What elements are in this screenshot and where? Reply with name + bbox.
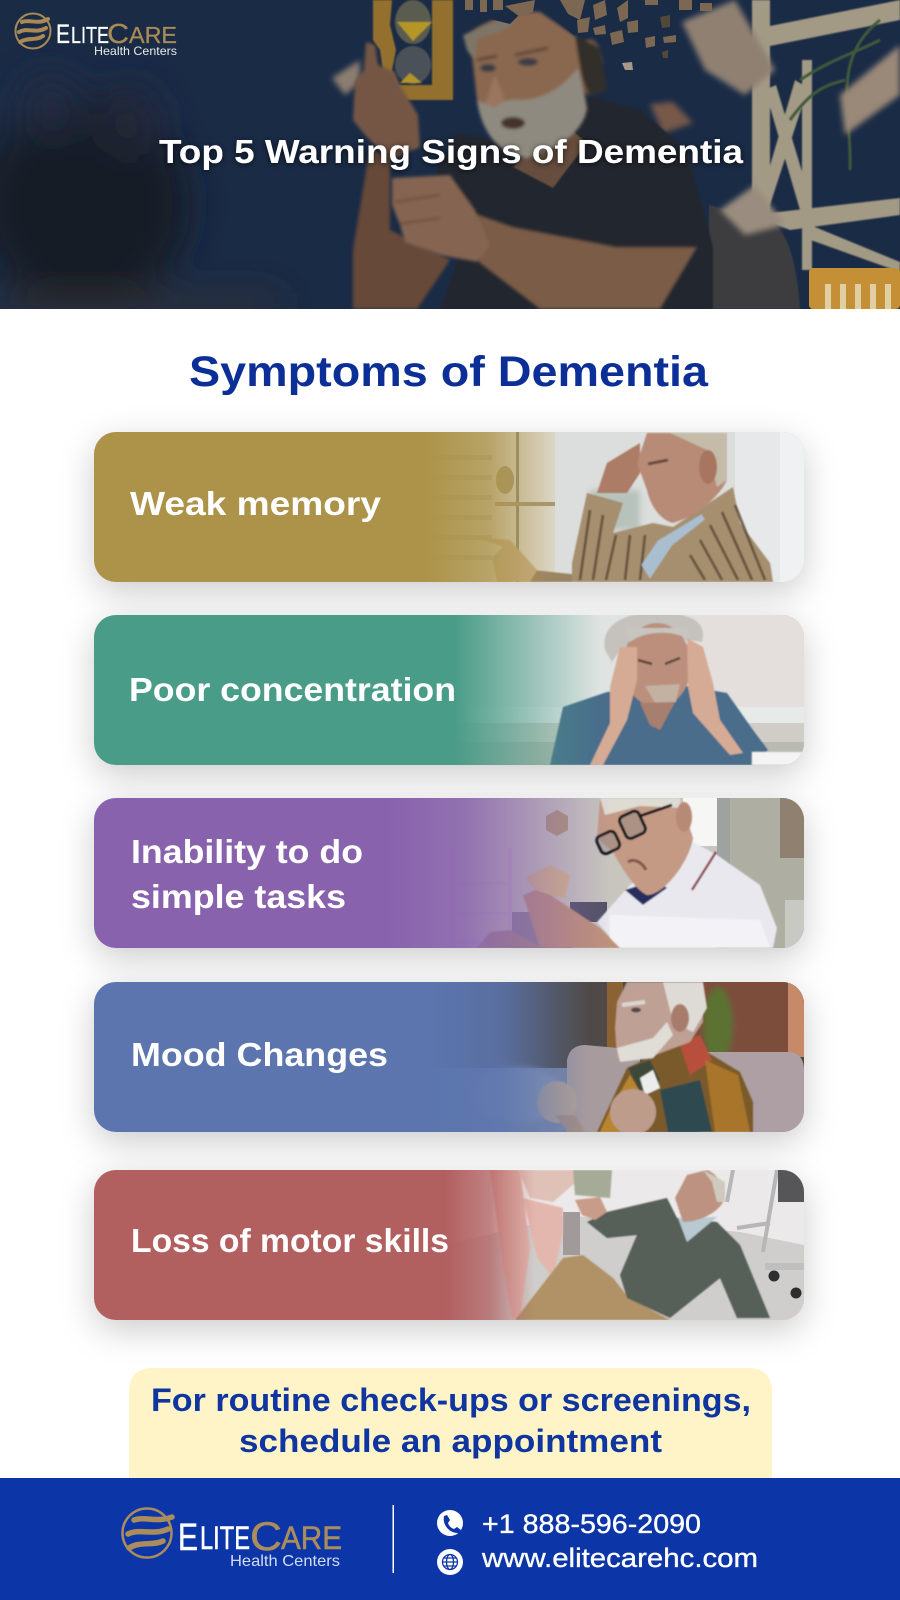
logo wordmark: C bbox=[107, 18, 129, 49]
flying fragments, blurred bbox=[332, 0, 900, 235]
icon: globe bbox=[437, 1549, 463, 1575]
left arm and hand holding hourglass bbox=[353, 42, 450, 309]
photo: man touching head at calendar bbox=[420, 432, 804, 582]
hourglass bbox=[373, 0, 453, 100]
footer logo wordmark: E bbox=[178, 1517, 198, 1559]
label: Weak memory bbox=[130, 485, 382, 522]
neck bbox=[513, 132, 587, 188]
panel fade bbox=[445, 1170, 531, 1320]
label: Mood Changes bbox=[131, 1036, 388, 1073]
blurred plant on left bbox=[0, 88, 266, 309]
hero title: Top 5 Warning Signs of Dementia bbox=[159, 133, 744, 170]
website: www.elitecarehc.com bbox=[481, 1543, 758, 1573]
panel fade bbox=[380, 798, 615, 948]
yellow basket bbox=[809, 268, 900, 309]
panel: mood changes bbox=[94, 982, 804, 1135]
logo wordmark bbox=[58, 24, 176, 55]
grey pouf bbox=[709, 205, 800, 309]
footer logo wordmark bbox=[178, 1515, 342, 1570]
logo wordmark: ARE bbox=[129, 22, 177, 48]
panel: inability to do simple tasks bbox=[94, 798, 804, 948]
panel: poor concentration bbox=[94, 613, 804, 765]
head fragments bbox=[465, 0, 712, 70]
phone number: +1 888-596-2090 bbox=[482, 1509, 701, 1539]
head with beard bbox=[463, 12, 607, 158]
photo: caregiver helping man off floor bbox=[445, 1170, 804, 1320]
callout text bbox=[151, 1382, 751, 1459]
section heading: Symptoms of Dementia bbox=[189, 348, 709, 396]
shirt bbox=[437, 97, 713, 309]
footer logo wordmark: ARE bbox=[281, 1520, 342, 1556]
hero banner photo: man with hourglass bbox=[0, 0, 900, 312]
footer logo bbox=[122, 1508, 342, 1570]
panel fade bbox=[420, 432, 560, 582]
photo: man holding temples bbox=[450, 613, 804, 765]
logo wordmark: Health Centers bbox=[94, 44, 177, 58]
logo wordmark: LITE bbox=[71, 22, 109, 48]
footer logo wordmark: LITE bbox=[200, 1520, 250, 1556]
shelf unit bbox=[752, 0, 900, 272]
head top gap bbox=[490, 10, 576, 36]
label bbox=[131, 833, 363, 915]
footer logo emblem bbox=[122, 1508, 172, 1558]
callout text: schedule an appointment bbox=[239, 1423, 662, 1459]
panel fade bbox=[450, 615, 605, 765]
photo: angry man with fists on sofa bbox=[468, 982, 804, 1132]
panel: loss of motor skills bbox=[94, 1170, 804, 1320]
plant on shelf bbox=[790, 20, 880, 170]
logo emblem bbox=[16, 14, 50, 48]
top left logo bbox=[16, 14, 177, 58]
label: simple tasks bbox=[131, 878, 346, 915]
callout: appointment bbox=[129, 1368, 772, 1478]
label: Poor concentration bbox=[129, 671, 456, 708]
callout text: For routine check-ups or screenings, bbox=[151, 1382, 751, 1418]
panel fade bbox=[430, 982, 595, 1132]
logo wordmark: E bbox=[56, 19, 70, 49]
photo: man examining puzzle piece bbox=[428, 798, 804, 948]
label: Inability to do bbox=[131, 833, 363, 870]
footer logo wordmark: Health Centers bbox=[230, 1553, 340, 1570]
right arm and fist bbox=[392, 175, 697, 309]
panel: weak memory bbox=[94, 432, 804, 582]
footer bar bbox=[0, 1478, 900, 1600]
label: Loss of motor skills bbox=[131, 1222, 449, 1259]
footer logo wordmark: C bbox=[250, 1515, 282, 1559]
icon: phone bbox=[437, 1510, 463, 1536]
